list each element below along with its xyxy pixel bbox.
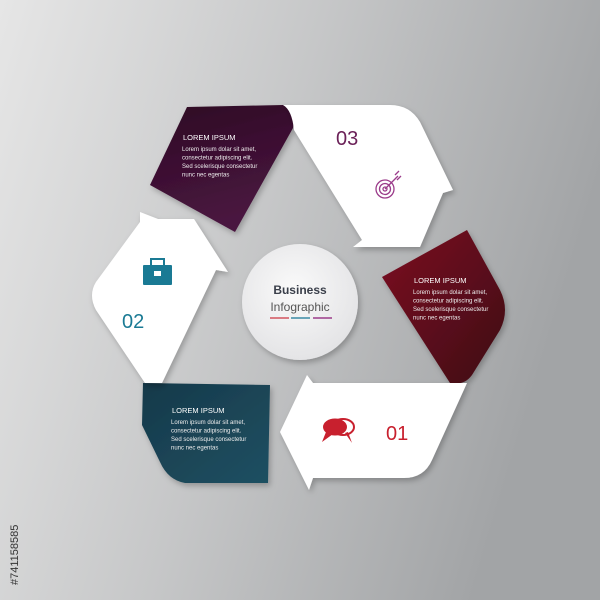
panel: purple top: Lorem ipsum dolar sit amet,: [182, 147, 256, 153]
panel: purple top: consectetur adipiscing elit.: [182, 156, 253, 162]
panel: teal bottom left: consectetur adipiscing elit.: [171, 428, 242, 434]
icon: target: [376, 171, 401, 198]
icon: briefcase: [143, 259, 172, 285]
center circle: Business: [273, 283, 327, 297]
arrow 03: [283, 105, 453, 247]
panel: teal bottom left: [142, 383, 270, 483]
panel: maroon right: LOREM IPSUM: [414, 276, 467, 285]
arrow 02: [92, 212, 228, 383]
arrow 01: [280, 375, 467, 490]
panel: teal bottom left: LOREM IPSUM: [172, 406, 225, 415]
arrow 02: 02: [122, 311, 144, 333]
panel: purple top: nunc nec egentas: [182, 172, 229, 178]
arrow 03: 03: [336, 128, 358, 150]
side id text: #741158585: [9, 525, 21, 585]
panel: maroon right: [382, 230, 505, 384]
center circle: [242, 244, 358, 360]
panel: purple top: LOREM IPSUM: [183, 133, 236, 142]
panel: maroon right: Lorem ipsum dolar sit amet,: [413, 290, 487, 296]
icon: speech bubbles: [322, 418, 354, 443]
panel: maroon right: Sed scelerisque consectetur: [413, 307, 488, 313]
center circle: Infographic: [270, 300, 330, 314]
panel: maroon right: nunc nec egentas: [413, 316, 460, 322]
panel: purple top: [150, 105, 294, 232]
panel: teal bottom left: Lorem ipsum dolar sit amet,: [171, 420, 245, 426]
panel: teal bottom left: nunc nec egentas: [171, 446, 218, 452]
panel: purple top: Sed scelerisque consectetur: [182, 164, 257, 170]
arrow 01: 01: [386, 423, 408, 445]
panel: teal bottom left: Sed scelerisque consectetur: [171, 437, 246, 443]
panel: maroon right: consectetur adipiscing elit.: [413, 298, 484, 304]
